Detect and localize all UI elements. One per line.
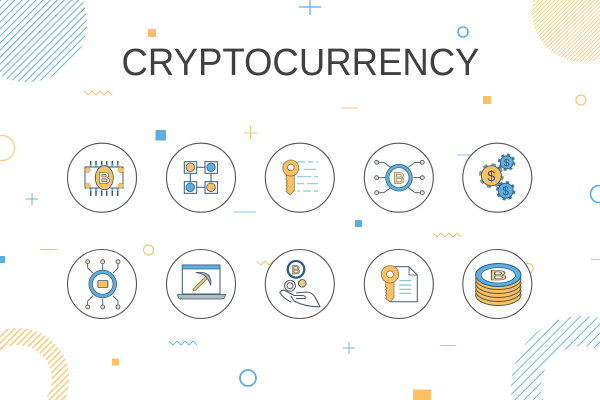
icon: coins over hand — [265, 250, 334, 318]
hatched circle: top right — [532, 0, 600, 62]
icon: bitcoin coin stack: B — [490, 268, 507, 283]
icon: laptop mining pickaxe — [166, 250, 236, 318]
icon: bitcoin chip — [68, 143, 136, 212]
icon: processor network — [68, 250, 136, 318]
icon: bitcoin network — [364, 143, 433, 212]
icon: coins over hand: B — [292, 263, 301, 277]
icon: blockchain blocks — [166, 143, 236, 212]
icon: key and document — [364, 250, 433, 318]
icon: dollar gears: $ — [502, 186, 509, 198]
icon: bitcoin coin stack — [463, 250, 532, 318]
icon: dollar gears — [463, 143, 532, 212]
icon: dollar gears: $ — [487, 169, 495, 185]
icon: bitcoin network: B — [393, 170, 405, 188]
icon: key with dashed lines — [265, 143, 334, 212]
hatched ring: bottom left — [0, 328, 69, 400]
hatched ring: bottom right — [511, 316, 600, 400]
title: CRYPTOCURRENCY — [122, 42, 480, 84]
hatched circle: top left — [0, 0, 87, 82]
icon: dollar gears: $ — [504, 158, 510, 169]
icon: bitcoin chip: B — [99, 171, 110, 188]
